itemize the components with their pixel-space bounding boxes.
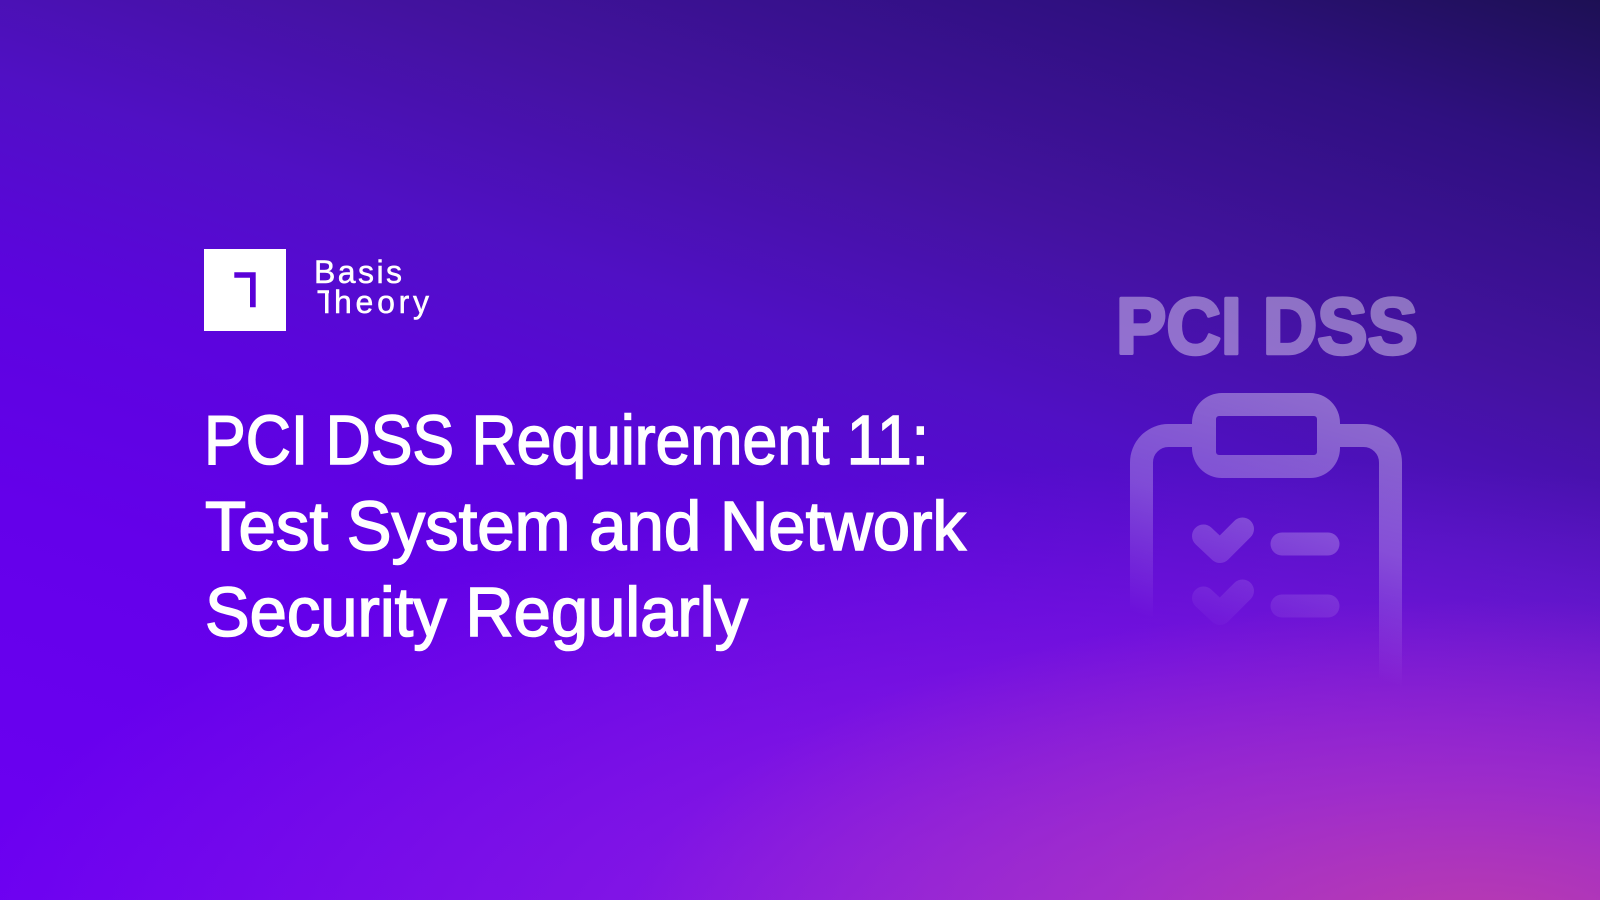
logo mark [204,249,286,331]
logo wordmark [314,254,429,320]
clipboard body [1142,436,1390,690]
logo [204,249,429,331]
title: Test System and Network [205,487,967,565]
check item 1 [1204,529,1328,552]
check item 2 [1204,591,1328,614]
title [204,401,967,651]
clipboard clip [1192,393,1340,478]
logo wordmark: T [317,284,337,320]
title: Security Regularly [205,573,748,651]
title: PCI DSS Requirement 11: [204,401,929,479]
icon: clipboard checklist [1142,393,1390,690]
logo wordmark: Basis [314,254,402,290]
PCI DSS label: PCI DSS [1116,282,1418,370]
logo wordmark: heory [334,284,429,320]
